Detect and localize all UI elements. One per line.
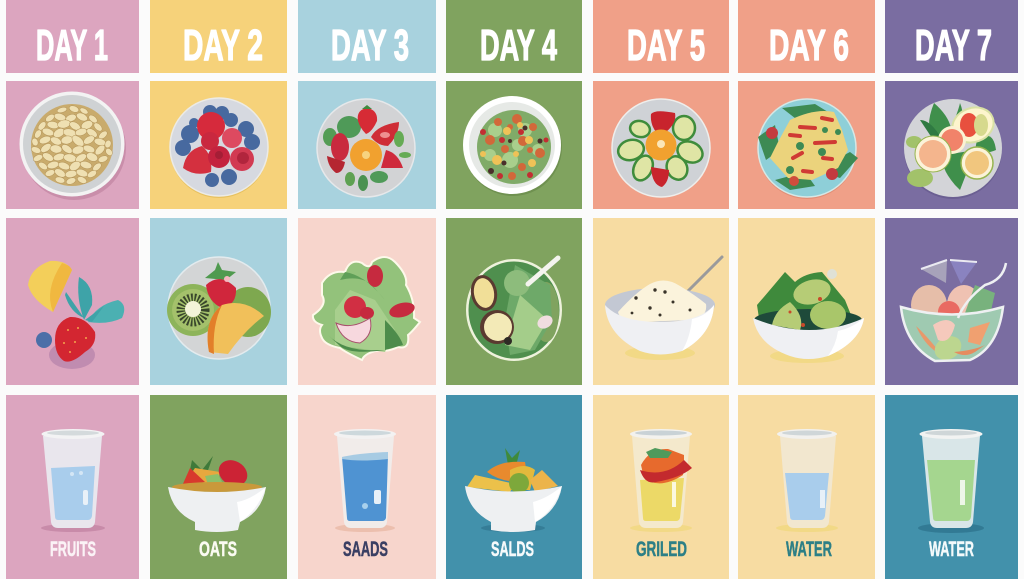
label: OATS: OATS <box>199 538 237 561</box>
icon: glass of green juice <box>918 429 984 533</box>
label: WATER: WATER <box>929 538 974 561</box>
icon: plate of grilled mix <box>758 99 858 199</box>
panel: day 7 water <box>885 395 1018 579</box>
icon: bowl of avocado greens <box>753 269 864 363</box>
panel: day 3 header <box>298 0 436 73</box>
label: WATER: WATER <box>786 538 832 561</box>
panel: day 7 breakfast <box>885 81 1018 209</box>
panel: day 6 breakfast <box>738 81 875 209</box>
panel: day 6 water <box>738 395 875 579</box>
icon: bowl of mango and vegetables <box>465 448 562 532</box>
panel: day 7 lunch <box>885 218 1018 385</box>
icon: green salad with strawberries <box>313 257 420 360</box>
panel: day 3 salads <box>298 395 436 579</box>
heading: DAY 1: DAY 1 <box>36 21 108 70</box>
panel: day 4 salads <box>446 395 582 579</box>
icon: plate of chopped salad <box>463 96 562 196</box>
icon: bowl of fruit <box>168 455 266 532</box>
panel: day 5 lunch <box>593 218 729 385</box>
panel: day 1 breakfast <box>6 81 139 209</box>
heading: DAY 4: DAY 4 <box>480 21 557 70</box>
panel: day 3 breakfast <box>298 81 436 209</box>
icon: plate of sliced fruit <box>904 99 1002 199</box>
panel: day 5 grilled <box>593 395 729 579</box>
icon: plate with kiwi, strawberry and mango <box>167 257 271 359</box>
panel: day 6 header <box>738 0 875 73</box>
label: SAADS: SAADS <box>343 538 388 561</box>
label: SALDS: SALDS <box>491 538 534 561</box>
icon: salad bowl with avocado <box>466 258 562 361</box>
panel: day 5 header <box>593 0 729 73</box>
heading: DAY 3: DAY 3 <box>331 21 409 70</box>
panel: day 2 lunch <box>150 218 287 385</box>
icon: plate of mixed fruit <box>317 99 415 197</box>
heading: DAY 5: DAY 5 <box>627 21 705 70</box>
panel: day 1 header <box>6 0 139 73</box>
label: GRILED: GRILED <box>636 538 687 561</box>
panel: day 7 header <box>885 0 1018 73</box>
panel: day 5 breakfast <box>593 81 729 209</box>
icon: glass of water <box>41 429 105 532</box>
icon: glass of blue water <box>334 429 396 532</box>
icon: glass of water <box>776 429 838 532</box>
icon: bowl of grains with spoon <box>605 257 722 360</box>
panel: day 1 fruits <box>6 395 139 579</box>
icon: lemon, leaves, strawberry and blueberry <box>28 261 124 369</box>
panel: day 4 lunch <box>446 218 582 385</box>
panel: day 6 lunch <box>738 218 875 385</box>
panel: day 3 lunch <box>298 218 436 385</box>
heading: DAY 2: DAY 2 <box>183 21 263 70</box>
panel: day 2 oats <box>150 395 287 579</box>
panel: day 1 lunch <box>6 218 139 385</box>
icon: plate of berries <box>170 98 268 198</box>
icon: glass bowl of fruit with straw <box>901 260 1006 365</box>
label: FRUITS: FRUITS <box>50 538 96 561</box>
heading: DAY 6: DAY 6 <box>769 21 849 70</box>
panel: day 4 header <box>446 0 582 73</box>
icon: bowl of oats <box>20 92 126 200</box>
panel: day 4 breakfast <box>446 81 582 209</box>
icon: plate with cucumber and orange <box>612 99 710 197</box>
panel: day 2 header <box>150 0 287 73</box>
icon: glass with grilled food and juice <box>630 429 692 532</box>
panel: day 2 breakfast <box>150 81 287 209</box>
